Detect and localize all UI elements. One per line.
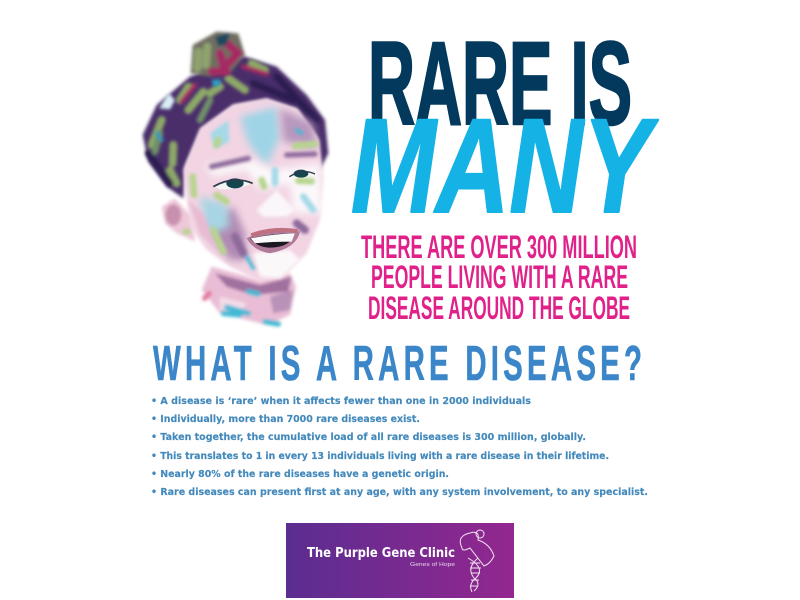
- bullet list: • This translates to 1 in every 13 individuals living with a rare disease in their lifetime.: [151, 451, 609, 462]
- bullet list: • A disease is ‘rare’ when it affects fewer than one in 2000 individuals: [151, 396, 531, 407]
- icon: dna and figures: [460, 530, 494, 592]
- bullet list: • Individually, more than 7000 rare diseases exist.: [151, 414, 420, 425]
- hair: [143, 56, 328, 198]
- neck and shoulders: [202, 267, 296, 325]
- logo name: The Purple Gene Clinic: [307, 546, 455, 561]
- logo tagline: Genes of Hope: [410, 562, 455, 568]
- logo banner: [286, 523, 514, 598]
- hair bun: [191, 32, 245, 87]
- bullet list: [151, 396, 648, 498]
- smile: [247, 228, 300, 253]
- pink statement: [361, 229, 637, 326]
- ear: [162, 198, 195, 242]
- bullet list: • Rare diseases can present first at any age, with any system involvement, to any specialist.: [151, 487, 648, 498]
- bullet list: • Nearly 80% of the rare diseases have a genetic origin.: [151, 469, 449, 480]
- right eye: [289, 170, 315, 178]
- illustration: painted child portrait: [143, 32, 328, 325]
- left eye: [213, 178, 253, 189]
- bullet list: • Taken together, the cumulative load of all rare diseases is 300 million, globally.: [151, 432, 586, 443]
- face: [183, 98, 323, 282]
- section heading: WHAT IS A RARE DISEASE?: [153, 335, 642, 391]
- headline: many: MANY: [351, 92, 659, 241]
